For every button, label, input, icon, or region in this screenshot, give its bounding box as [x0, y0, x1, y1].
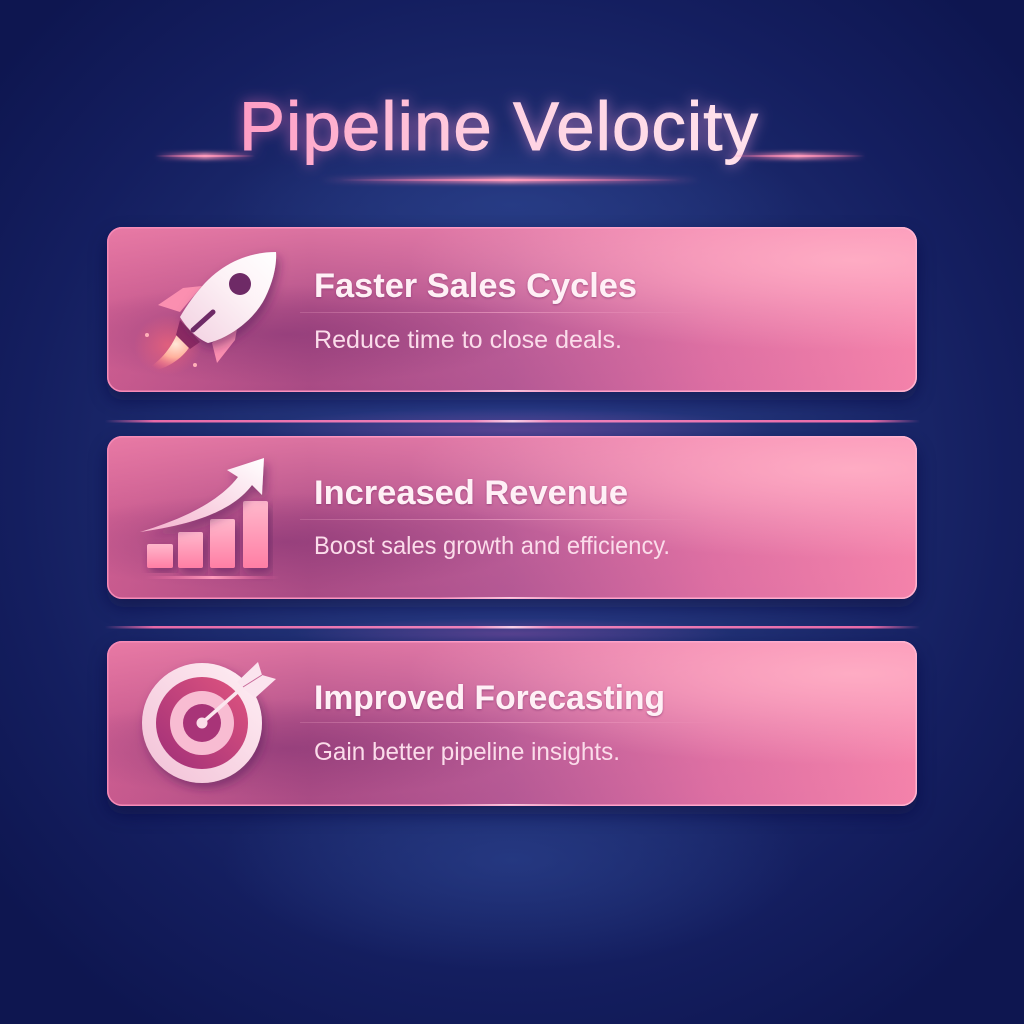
description: Boost sales growth and efficiency. [314, 532, 670, 560]
description: Reduce time to close deals. [314, 326, 622, 354]
panel: improved forecasting [107, 641, 917, 814]
heading: Increased Revenue [314, 474, 628, 512]
divider [105, 420, 920, 422]
title flare lines [155, 153, 865, 183]
icon: growth chart [140, 458, 280, 579]
panel: faster sales cycles [107, 227, 917, 400]
panel: increased revenue [107, 436, 917, 607]
heading: Improved Forecasting [314, 679, 665, 717]
divider [105, 626, 920, 628]
title: Pipeline Velocity [239, 88, 758, 165]
icon: target with arrow [142, 662, 276, 783]
description: Gain better pipeline insights. [314, 738, 620, 766]
heading: Faster Sales Cycles [314, 267, 637, 305]
icon: rocket [134, 252, 276, 375]
